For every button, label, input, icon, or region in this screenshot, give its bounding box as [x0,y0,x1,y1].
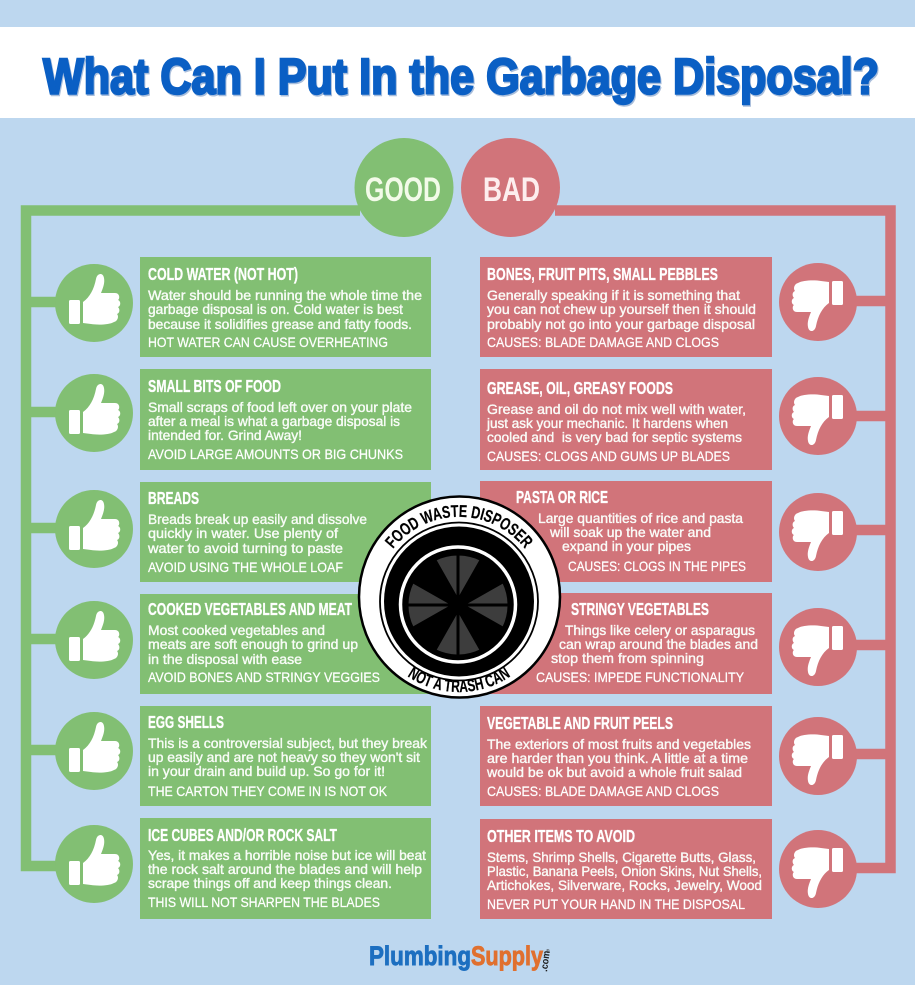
panel: egg shells: up easily and are not heavy so they won't sit [148,749,420,765]
green connector frame [26,210,360,866]
panel: pasta or rice [480,481,772,582]
panel: pasta or rice: will soak up the water and [549,524,711,540]
panel: breads: Breads break up easily and dissolve [148,511,367,527]
panel: stringy vegetables: can wrap around the blades and [559,636,758,652]
icon: thumb down 3 [779,493,857,571]
panel: other items to avoid: Plastic, Banana Peels, Onion Skins, Nut Shells, [487,863,762,879]
panel: bones, fruit pits, small pebbles: probably not go into your garbage disposal [487,316,755,332]
panel: vegetable and fruit peels: VEGETABLE AND FRUIT PEELS [487,713,673,733]
logo: plumbingsupply.com: Supply [471,941,543,971]
bad badge [461,138,560,237]
panel: cooked vegetables and meat: COOKED VEGETABLES AND MEAT [148,599,352,619]
panel: pasta or rice: expand in your pipes [562,538,691,554]
panel: other items to avoid: NEVER PUT YOUR HAND IN THE DISPOSAL [487,896,745,912]
panel: small bits of food: after a meal is what a garbage disposal is [148,413,400,429]
center badge: food waste disposer: NOT A TRASH CAN [408,667,510,692]
bad badge: BAD [483,171,540,209]
panel: breads: AVOID USING THE WHOLE LOAF [148,559,343,575]
panel: cooked vegetables and meat: in the disposal with ease [148,651,302,667]
panel: bones, fruit pits, small pebbles: Generally speaking if it is something that [487,287,740,303]
panel: breads [140,482,431,582]
panel: vegetable and fruit peels: would be ok but avoid a whole fruit salad [486,764,742,780]
panel: ice cubes and rock salt: THIS WILL NOT SHARPEN THE BLADES [148,894,380,910]
panel: stringy vegetables: Things like celery or asparagus [565,622,755,638]
icon: thumb up 4 [55,601,133,679]
panel: grease, oil, greasy foods: just ask your mechanic. It hardens when [486,415,728,431]
center badge: food waste disposer: FOOD WASTE DISPOSER [384,505,532,549]
panel: cold water: because it solidifies grease and fatty foods. [148,316,412,332]
panel: small bits of food: SMALL BITS OF FOOD [148,376,281,396]
panel: bones, fruit pits, small pebbles [480,257,772,357]
panel: stringy vegetables: CAUSES: IMPEDE FUNCTIONALITY [536,669,745,685]
panel: egg shells: THE CARTON THEY COME IN IS NOT OK [148,783,388,799]
panel: vegetable and fruit peels: are harder than you think. A little at a time [487,750,748,766]
panel: grease, oil, greasy foods: cooled and is very bad for septic systems [487,429,742,445]
logo: plumbingsupply.com [369,941,553,972]
icon: thumb down 4 [779,608,857,686]
icon: thumb up 1 [55,264,133,342]
good badge [354,138,454,237]
panel: small bits of food: AVOID LARGE AMOUNTS OR BIG CHUNKS [148,446,403,462]
panel: grease, oil, greasy foods [480,369,772,470]
panel: egg shells: EGG SHELLS [148,712,224,732]
panel: cold water: HOT WATER CAN CAUSE OVERHEATING [148,334,388,350]
panel: other items to avoid: Artichokes, Silverware, Rocks, Jewelry, Wood [487,877,762,893]
icon: thumb down 5 [779,717,857,795]
logo: plumbingsupply.com: Plumbing [369,941,471,971]
panel: breads: quickly in water. Use plenty of [148,525,338,541]
panel: small bits of food: intended for. Grind Away! [148,427,302,443]
panel: egg shells: This is a controversial subject, but they break [148,735,428,751]
panel: cooked vegetables and meat: Most cooked vegetables and [148,622,325,638]
panel: vegetable and fruit peels: CAUSES: BLADE DAMAGE AND CLOGS [487,783,719,799]
panel: vegetable and fruit peels: The exteriors of most fruits and vegetables [487,736,751,752]
title banner [0,27,915,118]
panel: ice cubes and rock salt: ICE CUBES AND/OR ROCK SALT [148,825,337,845]
panel: stringy vegetables: STRINGY VEGETABLES [571,599,709,619]
panel: ice cubes and rock salt [140,818,431,919]
panel: cold water [140,257,431,357]
panel: pasta or rice: PASTA OR RICE [516,487,608,507]
panel: small bits of food: Small scraps of food left over on your plate [148,399,412,415]
panel: small bits of food [140,369,431,470]
panel: bones, fruit pits, small pebbles: CAUSES: BLADE DAMAGE AND CLOGS [487,334,719,350]
red connector frame [555,210,890,868]
icon: thumb down 2 [779,377,857,455]
panel: stringy vegetables [480,593,772,694]
panel: egg shells: in your drain and build up. So go for it! [148,763,385,779]
logo: plumbingsupply.com: .com [539,950,553,972]
panel: other items to avoid [480,819,772,919]
panel: bones, fruit pits, small pebbles: you can not chew up yourself then it should [487,301,756,317]
panel: stringy vegetables: stop them from spinning [551,650,704,666]
panel: pasta or rice: CAUSES: CLOGS IN THE PIPES [568,558,746,574]
panel: cold water: garbage disposal is on. Cold water is best [148,301,403,317]
panel: grease, oil, greasy foods: Grease and oil do not mix well with water, [487,401,746,417]
icon: thumb down 6 [779,830,857,908]
panel: pasta or rice: Large quantities of rice and pasta [538,510,743,526]
icon: thumb up 3 [55,490,133,568]
logo: plumbingsupply.com: ® [546,948,550,955]
panel: ice cubes and rock salt: the rock salt around the blades and will help [148,861,422,877]
panel: grease, oil, greasy foods: GREASE, OIL, GREASY FOODS [487,378,673,398]
panel: cooked vegetables and meat: AVOID BONES AND STRINGY VEGGIES [148,669,380,685]
icon: thumb up 6 [55,825,133,903]
panel: ice cubes and rock salt: scrape things off and keep things clean. [148,875,392,891]
panel: breads: BREADS [148,488,199,508]
icon: thumb up 2 [55,374,133,452]
center badge: food waste disposer [358,495,562,699]
panel: egg shells [140,706,431,806]
panel: cold water: Water should be running the whole time the [148,287,422,303]
icon: thumb up 5 [55,712,133,790]
panel: bones, fruit pits, small pebbles: BONES, FRUIT PITS, SMALL PEBBLES [487,264,718,284]
panel: cooked vegetables and meat [140,594,431,694]
panel: grease, oil, greasy foods: CAUSES: CLOGS AND GUMS UP BLADES [487,448,730,464]
panel: cooked vegetables and meat: meats are soft enough to grind up [148,636,358,652]
panel: other items to avoid: Stems, Shrimp Shells, Cigarette Butts, Glass, [487,849,756,865]
good badge: GOOD [365,171,441,209]
disposer blades [408,555,508,655]
panel: vegetable and fruit peels [480,706,772,806]
icon: thumb down 1 [779,263,857,341]
panel: cold water: COLD WATER (NOT HOT) [148,264,298,284]
panel: other items to avoid: OTHER ITEMS TO AVOID [487,826,635,846]
panel: ice cubes and rock salt: Yes, it makes a horrible noise but ice will beat [148,847,426,863]
panel: breads: water to avoid turning to paste [147,540,343,556]
